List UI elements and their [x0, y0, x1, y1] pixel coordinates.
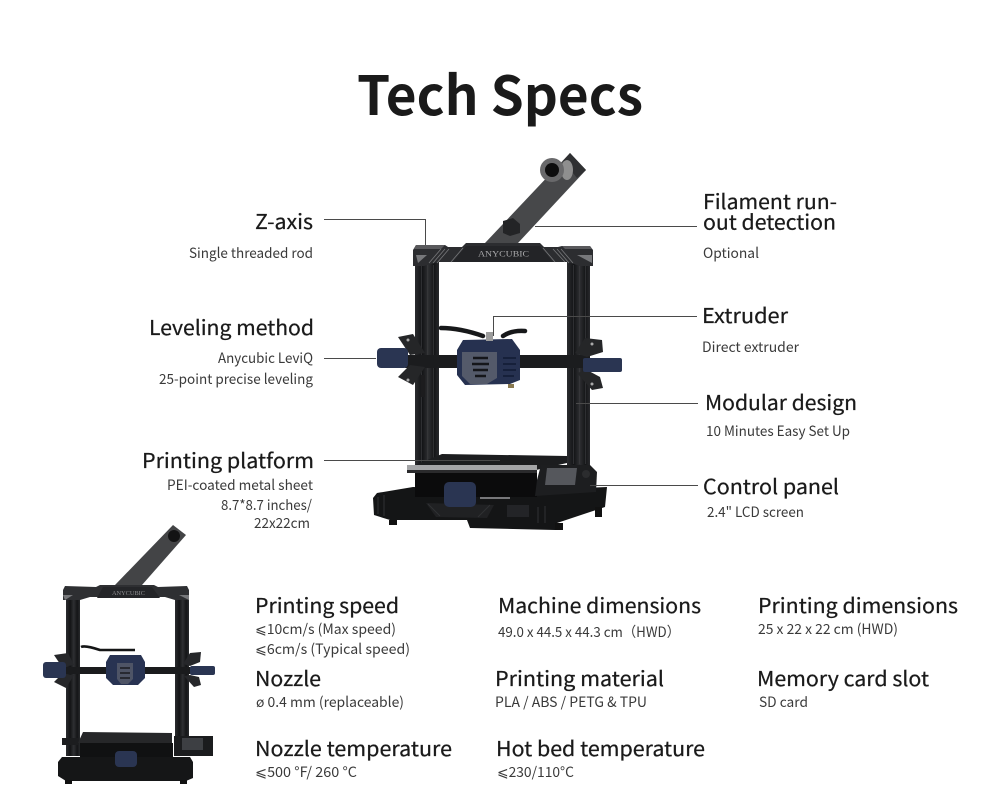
frame columns: [415, 258, 590, 470]
spec: Nozzle: [255, 662, 404, 712]
small y-axis knob: [115, 751, 137, 767]
callout: Leveling method: 25-point precise leveling: [159, 369, 313, 389]
leader line: filament detection: [535, 226, 697, 228]
small x-axis bar: [63, 667, 193, 674]
callout: Filament run-out detection: Filament run-: [703, 185, 837, 215]
callout: Filament run-out detection: Optional: [703, 243, 759, 263]
spec: Nozzle: Nozzle: [255, 662, 321, 692]
spec: Memory card slot: [757, 662, 929, 712]
small top frame: [63, 585, 189, 600]
leader line: modular design: [576, 402, 698, 404]
spec: Nozzle temperature: Nozzle temperature: [255, 732, 452, 762]
callout: Leveling method: Leveling method: [149, 311, 314, 341]
spec: Machine dimensions: 49.0 x 44.5 x 44.3 cm（HWD）: [498, 622, 680, 642]
spec: Printing speed: Printing speed: [255, 589, 399, 619]
callout: Printing platform: [142, 444, 314, 533]
x-axis bar: [405, 355, 590, 368]
spec: Hot bed temperature: ⩽230/110°C: [497, 762, 574, 782]
small bed: [62, 732, 173, 758]
callout: Printing platform: Printing platform: [142, 444, 314, 474]
small filament arm: [115, 525, 186, 585]
callout: Extruder: Direct extruder: [702, 337, 800, 357]
leader line: printing platform: [324, 460, 500, 462]
spec: Nozzle temperature: [255, 732, 452, 782]
base: [373, 487, 607, 530]
small top frame: ANYCUBIC: [112, 590, 145, 597]
spec: Nozzle: ø 0.4 mm (replaceable): [256, 692, 404, 712]
callout: Modular design: Modular design: [705, 386, 857, 416]
callout: Leveling method: [149, 311, 314, 389]
callout: Modular design: 10 Minutes Easy Set Up: [706, 421, 850, 441]
callout: Filament run-out detection: out detection: [703, 206, 836, 236]
top frame bar: [413, 243, 593, 266]
small control panel: [174, 736, 213, 756]
spec: Printing material: PLA / ABS / PETG & TPU: [495, 692, 647, 712]
leader line: leveling: [324, 358, 376, 360]
extruder cable: [441, 328, 525, 336]
spec: Machine dimensions: Machine dimensions: [498, 589, 701, 619]
y-axis motor knob: [444, 482, 476, 507]
callout: Z-axis: Z-axis: [255, 205, 313, 235]
callout: Control panel: 2.4" LCD screen: [707, 502, 804, 522]
leader line: control panel: [590, 484, 698, 486]
title: Tech Specs: [357, 52, 643, 131]
ANYCUBIC logo: ANYCUBIC: [478, 248, 529, 258]
small cable: [81, 646, 135, 650]
small frame columns: [66, 596, 189, 756]
spec: Printing dimensions: Printing dimensions: [758, 589, 958, 619]
filament holder arm: [485, 153, 586, 243]
callout: Printing platform: 22x22cm: [254, 513, 310, 533]
callout: Printing platform: 8.7*8.7 inches/: [221, 495, 312, 515]
leader line: extruder: [494, 316, 697, 336]
spec: Nozzle temperature: ⩽500 °F/ 260 °C: [255, 762, 357, 782]
spec: Memory card slot: SD card: [759, 692, 808, 712]
spec: Memory card slot: Memory card slot: [757, 662, 929, 692]
small left motor and bracket: [43, 653, 74, 688]
callout: Extruder: [702, 299, 800, 357]
main printer illustration: [373, 153, 622, 530]
left bracket and motor: [377, 334, 425, 397]
callout: Control panel: Control panel: [703, 470, 839, 500]
small printer illustration: [43, 525, 215, 784]
spec: Hot bed temperature: Hot bed temperature: [496, 732, 705, 762]
callout: Z-axis: Single threaded rod: [189, 243, 313, 263]
callout: Leveling method: Anycubic LeviQ: [218, 348, 313, 368]
right bracket and motor: [575, 338, 622, 390]
callout: Z-axis: [189, 205, 313, 263]
print bed: [407, 454, 567, 499]
control panel: [535, 465, 597, 496]
callout: Filament run-out detection: [703, 185, 837, 263]
spec: Printing dimensions: [758, 589, 958, 639]
spec: Printing material: [495, 662, 664, 712]
callout: Extruder: Extruder: [702, 299, 788, 329]
print head: [457, 332, 520, 388]
callout: Printing platform: PEI-coated metal sheet: [167, 475, 314, 495]
small print head: [106, 655, 145, 685]
spec: Printing speed: [255, 589, 410, 659]
leader line: Z-axis: [324, 220, 426, 245]
spec: Printing dimensions: 25 x 22 x 22 cm (HWD): [758, 619, 898, 639]
small base: [58, 757, 193, 784]
callout: Modular design: [705, 386, 857, 441]
small right motor and bracket: [183, 652, 215, 687]
spec: Printing speed: ⩽6cm/s (Typical speed): [255, 639, 410, 659]
spec: Machine dimensions: [498, 589, 701, 642]
callout: Control panel: [703, 470, 839, 522]
spec: Printing speed: ⩽10cm/s (Max speed): [255, 619, 396, 639]
spec: Hot bed temperature: [496, 732, 705, 782]
spec: Printing material: Printing material: [495, 662, 664, 692]
